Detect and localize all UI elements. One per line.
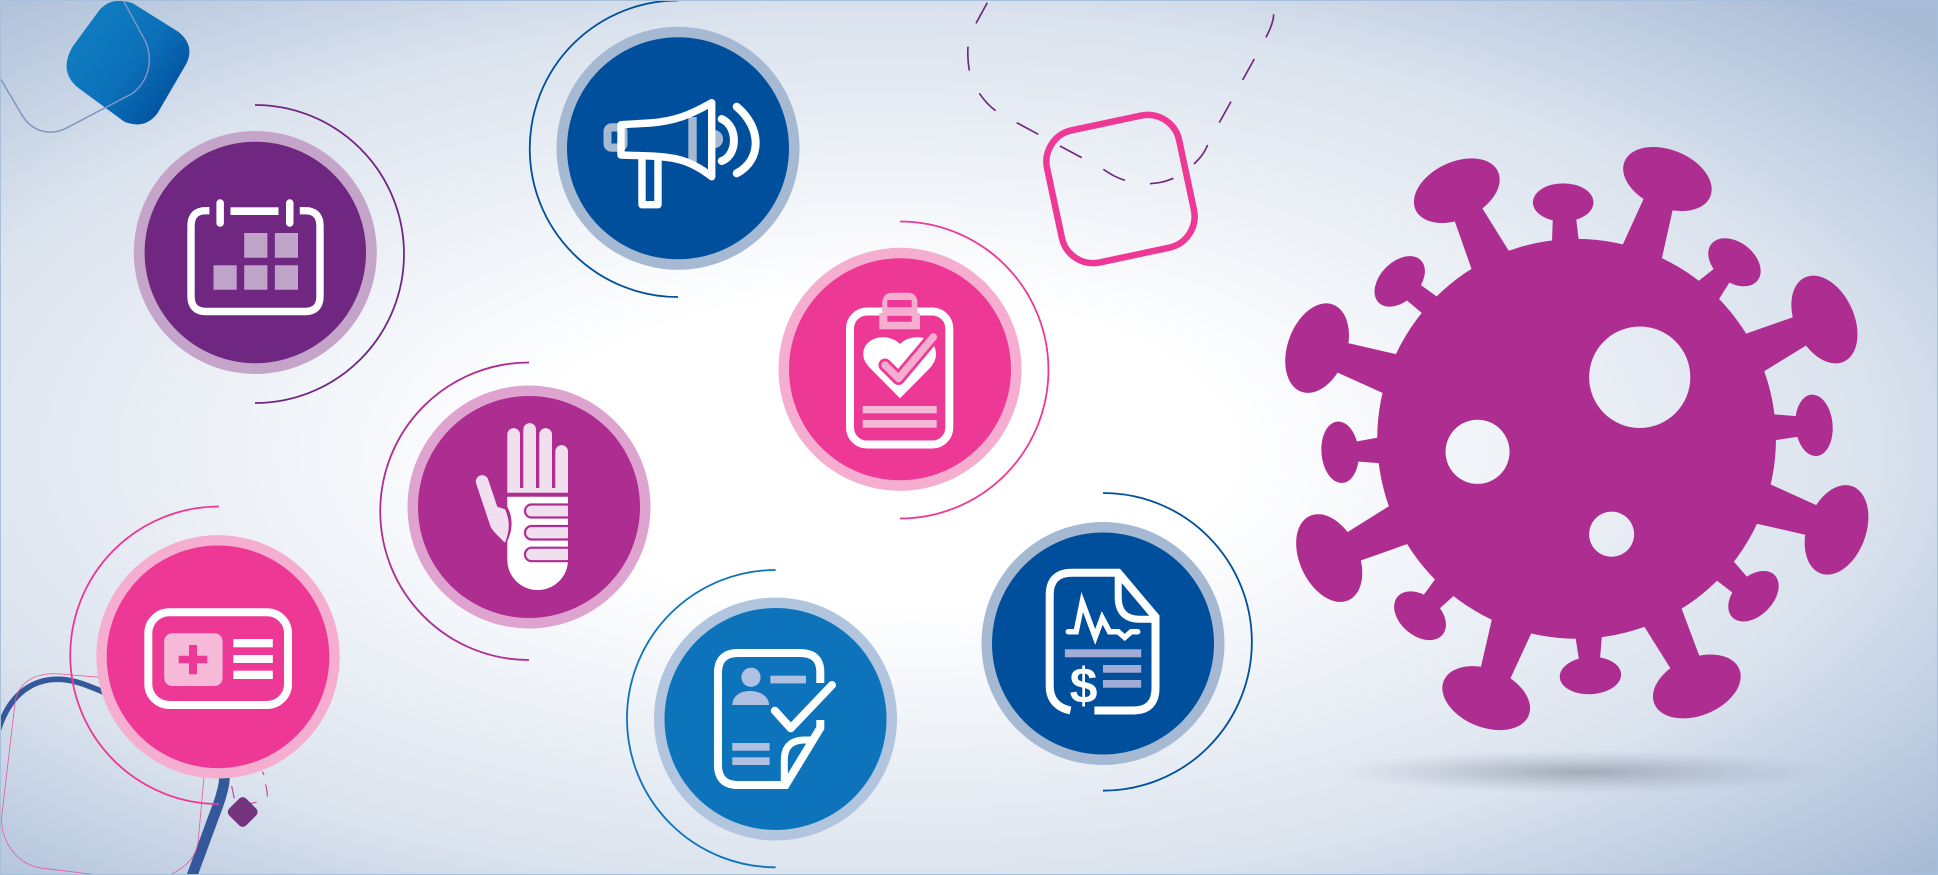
virus shadow (1332, 750, 1832, 794)
icon circle: gloved hand (380, 362, 650, 660)
dashed purple path (968, 3, 1274, 184)
icon circle: medical ID card (70, 506, 340, 804)
icon: megaphone (604, 103, 756, 205)
icon: clipboard with heart and check (850, 293, 949, 444)
icon circle: billing document (982, 493, 1252, 791)
icon: document with person and check (718, 653, 832, 785)
small purple diamond (226, 795, 260, 829)
icon circle: megaphone (530, 0, 800, 297)
icon circle: calendar (134, 105, 404, 403)
virus illustration (1274, 135, 1880, 742)
bottom-left decorative lines (0, 674, 267, 875)
icon: ID card (148, 612, 288, 705)
icon: document with chart and dollar (1050, 573, 1156, 714)
decorative blue rounded diamond (67, 1, 189, 124)
icon: hand in glove (476, 423, 576, 590)
thin blue outline shape (0, 0, 149, 132)
icon circle: health clipboard (778, 222, 1048, 518)
icon: document with chart and dollar: $ (1070, 658, 1098, 714)
pink rounded square outline (1040, 109, 1201, 269)
icon circle: patient checklist document (627, 570, 897, 867)
icon: calendar (191, 199, 320, 312)
